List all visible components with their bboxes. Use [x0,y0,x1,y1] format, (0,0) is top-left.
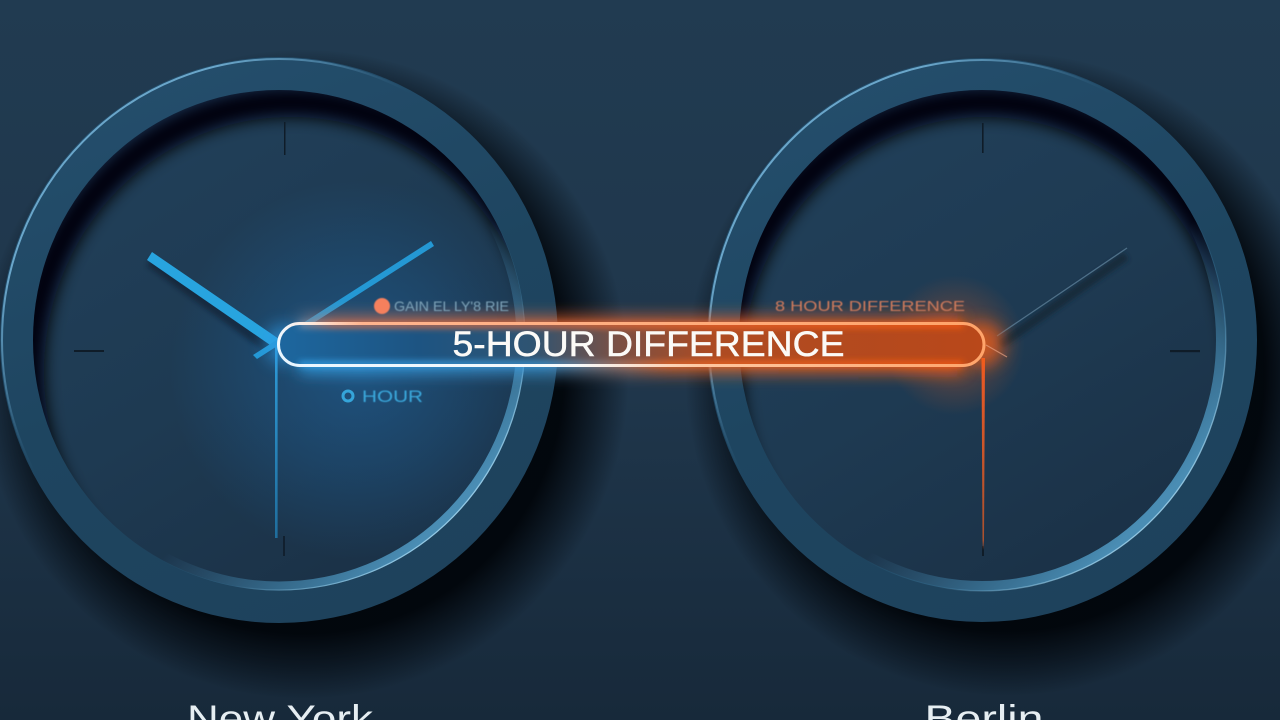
outer rim highlight: Berlin [709,60,1255,620]
label: hour caption [343,387,423,406]
pill label: 5-HOUR DIFFERENCE [452,325,844,364]
hour text: HOUR [362,387,423,406]
clock: New York [0,49,629,699]
pill outline: bottom [278,344,984,366]
connector pill: 5-hour difference [264,322,1007,366]
orange dot [374,298,390,314]
clock dial: New York [33,90,523,588]
clock shadow: New York [0,49,629,699]
pill inner glow: bottom [299,362,963,366]
clock: Berlin [685,52,1280,696]
pill inner glow: top [299,322,963,328]
clock shadow: Berlin [685,52,1280,696]
hour hand: New York [147,252,279,354]
pill end glow: blue [264,324,304,364]
pill outline: top and right cap [278,324,984,344]
hour icon [343,391,353,401]
second hand: Berlin [982,358,985,550]
spark: Berlin hub [986,345,1007,357]
clock ring: New York [0,57,558,623]
hour hand: Berlin [997,248,1127,345]
outer rim highlight: New York [2,59,556,621]
caption text: GAIN EL LY'8 RIE [394,298,509,314]
pill bottom glow [299,360,963,372]
clock dial: Berlin [740,90,1225,588]
second hand: New York [275,345,278,538]
pill fill [278,323,984,366]
tick marks: New York [74,122,286,556]
clock ring: Berlin [707,58,1257,622]
pill end glow: orange [960,322,1004,366]
pill top glow [299,318,963,328]
tick marks: Berlin [982,123,1200,556]
label: Berlin caption above bar: 8 HOUR DIFFERENCE [775,298,965,315]
inner rim band: Berlin [738,89,1226,591]
label: New York caption above bar [374,298,509,314]
inner rim band: New York [33,90,525,590]
minute hand: New York [253,241,434,359]
